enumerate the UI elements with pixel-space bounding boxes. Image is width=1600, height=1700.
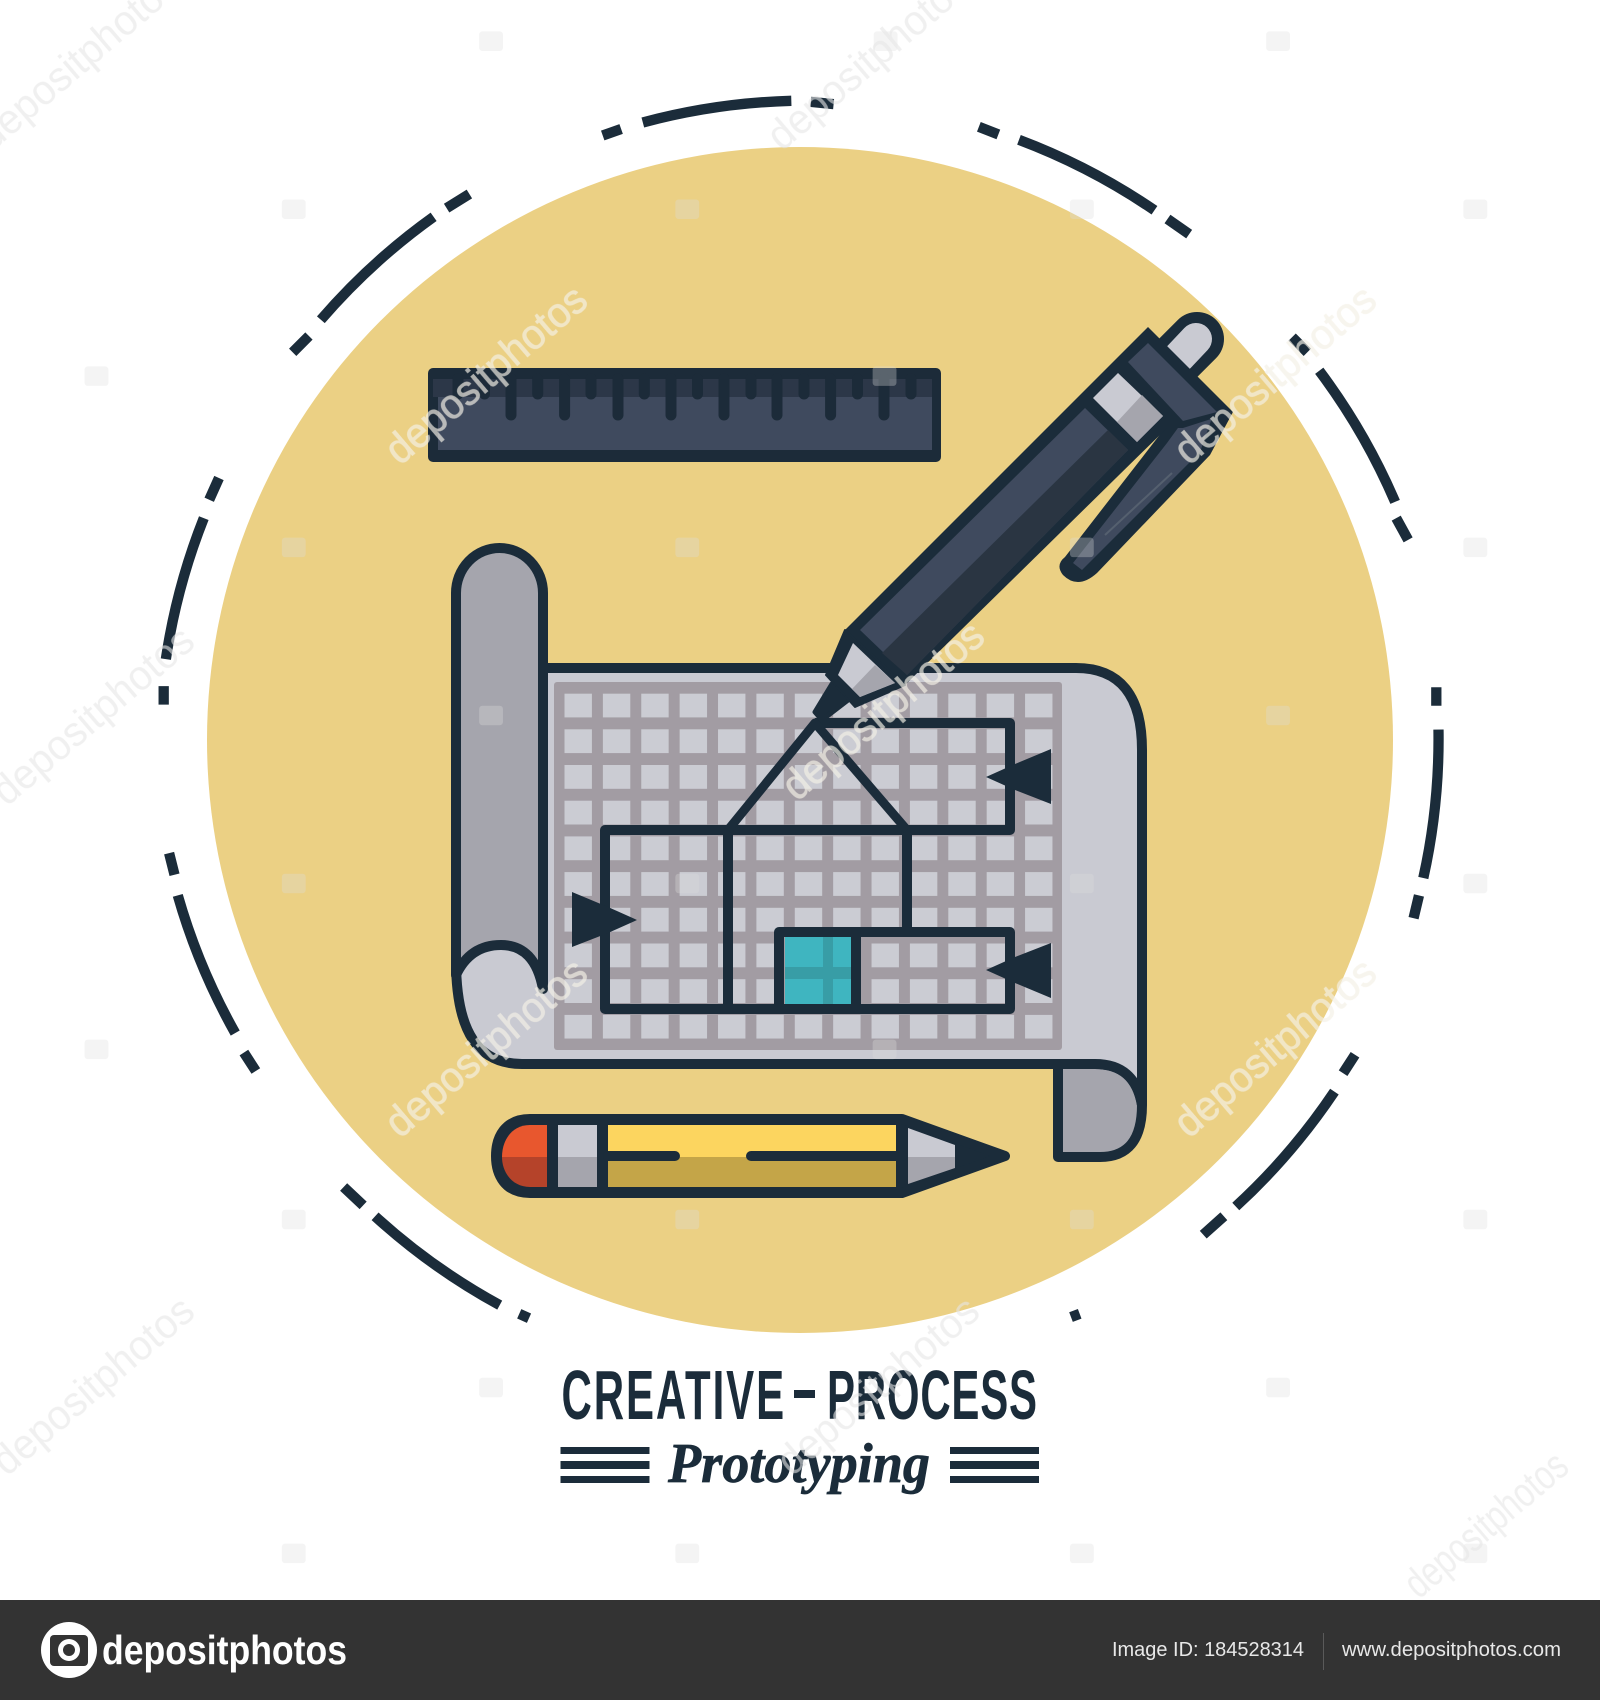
website url: www.depositphotos.com — [1341, 1639, 1561, 1661]
footer bar — [0, 1600, 1600, 1700]
title: CREATIVE — [562, 1357, 784, 1435]
watermark text — [375, 275, 1385, 1146]
pencil band — [558, 1125, 597, 1187]
watermark text: depositphotos — [1164, 948, 1385, 1146]
footer divider — [1323, 1633, 1324, 1670]
pen button — [1179, 339, 1197, 357]
icon: blueprint paper scroll — [456, 548, 1142, 1157]
dashed ring around circle — [164, 101, 1439, 1318]
pen metal band — [1093, 373, 1163, 442]
title: PROCESS — [827, 1357, 1037, 1435]
left paper roll — [456, 548, 543, 989]
yellow background circle — [207, 147, 1393, 1333]
grid backing — [554, 682, 1062, 1050]
roof — [728, 723, 907, 830]
teal window — [785, 937, 851, 1004]
footer logo icon: camera — [41, 1622, 97, 1678]
watermark text: depositphotos — [375, 275, 596, 473]
pencil cone — [908, 1128, 955, 1184]
title — [562, 1357, 1037, 1435]
watermark camera marks — [85, 31, 1487, 1563]
arrow top right — [986, 749, 1051, 804]
house floor plan drawing — [572, 723, 1051, 1009]
pencil outline — [496, 1119, 1005, 1193]
footer logo wordmark: depositphotos — [102, 1627, 347, 1673]
watermark text: depositphotos — [772, 611, 993, 809]
paper sheet — [456, 668, 1142, 1105]
pen body shade — [882, 430, 1128, 675]
floor plan lines — [605, 723, 1010, 1009]
pen head — [1128, 343, 1217, 421]
paper outline — [456, 668, 1142, 1105]
pencil eraser — [502, 1125, 547, 1187]
arrow bottom right — [986, 943, 1051, 998]
right stripes — [950, 1447, 1039, 1483]
arrow left — [572, 892, 637, 947]
watermark text: depositphotos — [375, 948, 596, 1146]
pen silhouette — [845, 327, 1233, 685]
pen body — [860, 408, 1128, 675]
left stripes — [560, 1447, 650, 1483]
icon: pencil — [496, 1119, 1005, 1193]
pen clip — [1059, 412, 1233, 582]
pencil body — [608, 1125, 902, 1187]
watermark text: depositphotos — [1164, 275, 1385, 473]
icon: pen — [815, 327, 1233, 720]
subtitle: Prototyping — [667, 1433, 930, 1495]
grid cells — [564, 694, 1052, 1039]
image id: Image ID: 184528314 — [1112, 1639, 1304, 1661]
watermark text outside circle: depositphotos — [767, 1286, 988, 1484]
pen tip — [815, 630, 905, 720]
icon: ruler — [428, 368, 941, 462]
bottom right paper curl — [1058, 1064, 1142, 1157]
